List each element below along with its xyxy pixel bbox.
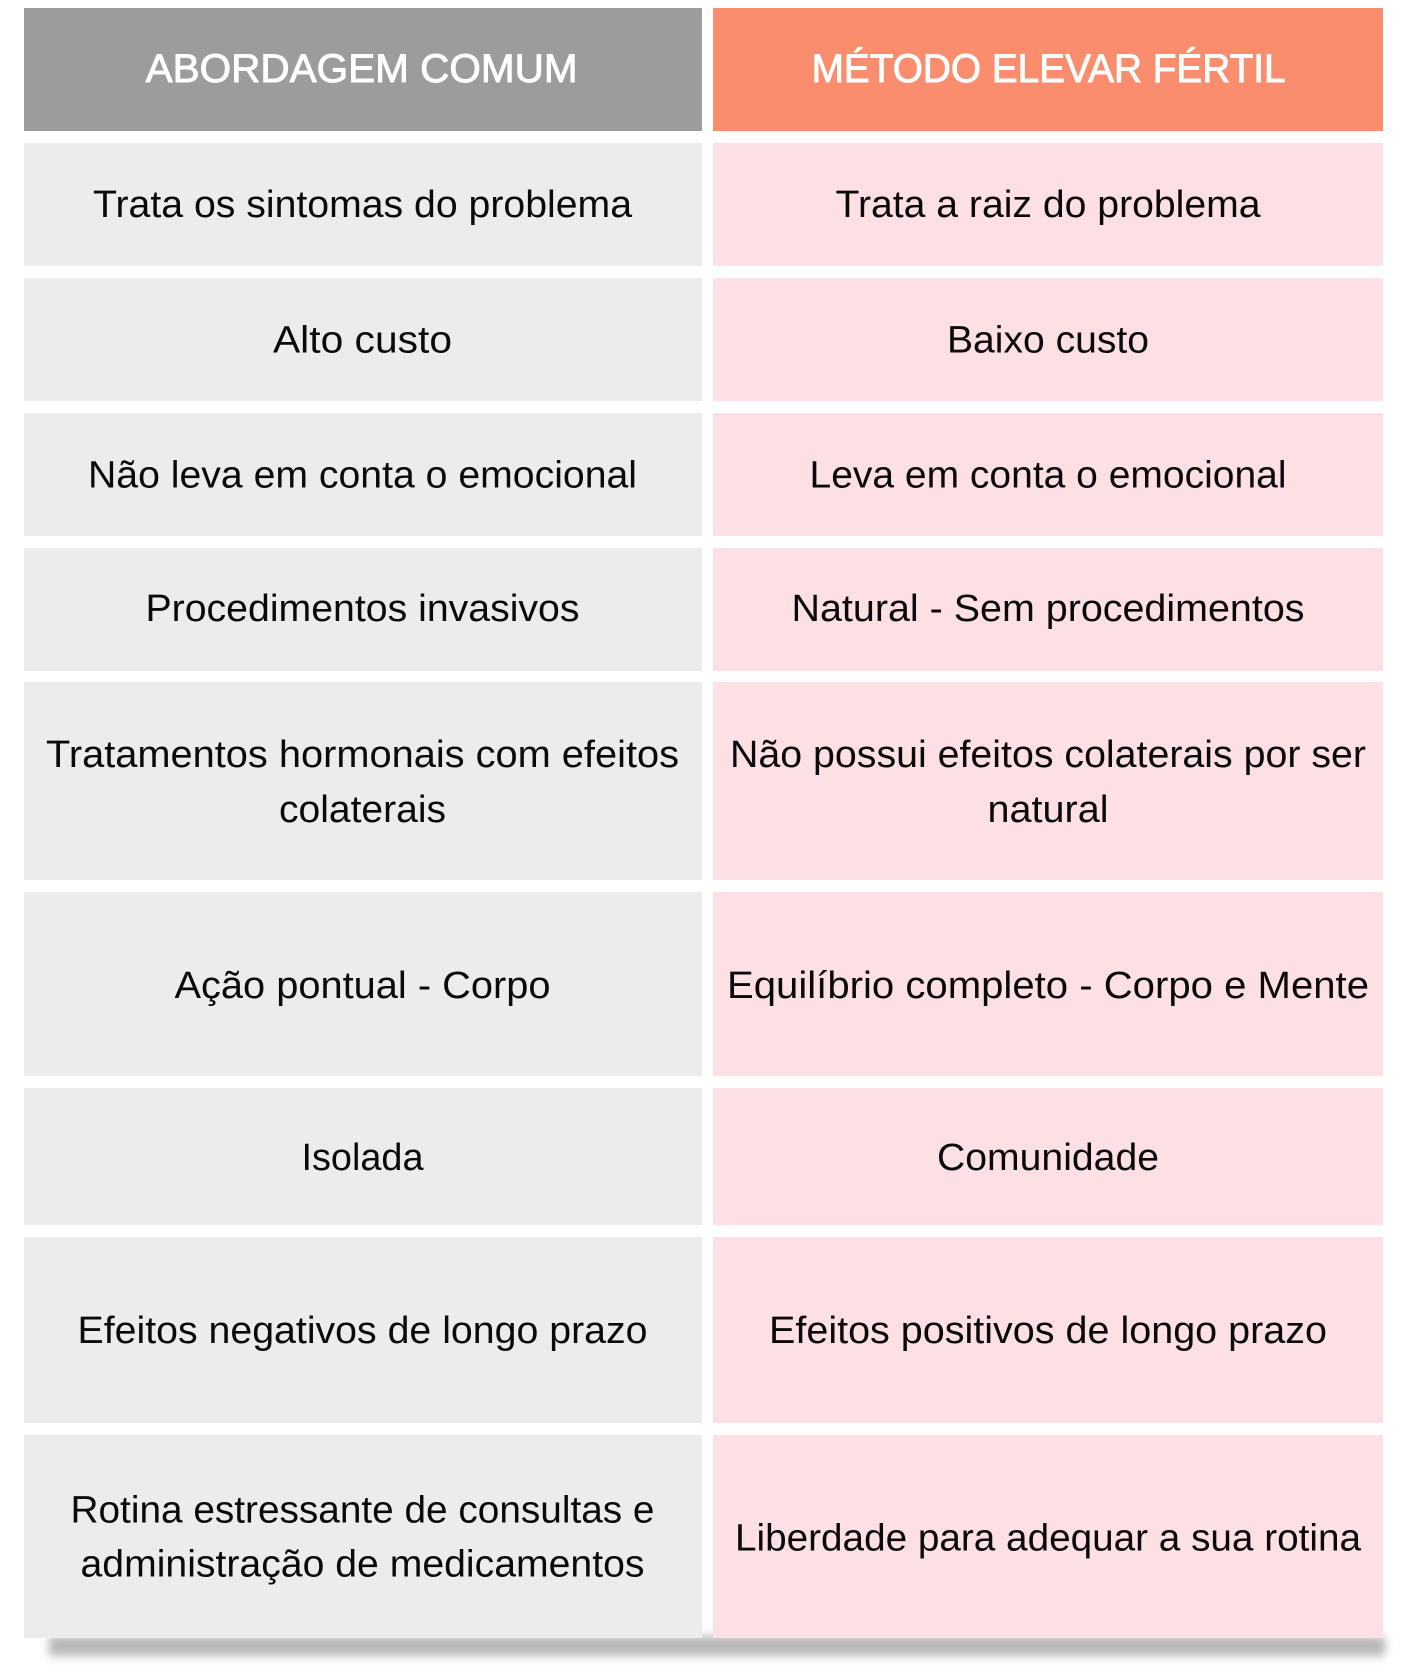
heading: abordagem comum: ABORDAGEM COMUM <box>146 47 578 91</box>
row 8 elevar: Efeitos positivos de longo prazo <box>769 1310 1327 1352</box>
row 9 comum: Rotina estressante de consultas e <box>70 1490 654 1532</box>
row 1 comum: Trata os sintomas do problema <box>93 184 633 226</box>
row 6 comum <box>24 892 702 1076</box>
row 2 elevar <box>713 278 1383 401</box>
row 7 comum: Isolada <box>302 1137 424 1179</box>
row 4 comum: Procedimentos invasivos <box>146 588 580 630</box>
row 3 elevar <box>713 413 1383 536</box>
row 2 comum <box>24 278 702 401</box>
row 8 comum <box>24 1237 702 1423</box>
table bottom shadow <box>49 1636 1385 1656</box>
row 5 elevar: natural <box>988 789 1108 831</box>
row 4 comum <box>24 548 702 671</box>
row 6 elevar: Equilíbrio completo - Corpo e Mente <box>727 965 1369 1007</box>
row 6 comum: Ação pontual - Corpo <box>174 965 550 1007</box>
row 5 elevar: Não possui efeitos colaterais por ser <box>730 734 1366 776</box>
row 9 comum <box>24 1435 702 1638</box>
row 9 elevar <box>713 1435 1383 1638</box>
row 3 comum: Não leva em conta o emocional <box>88 454 637 496</box>
row 1 elevar: Trata a raiz do problema <box>836 184 1261 226</box>
row 9 comum: administração de medicamentos <box>80 1544 644 1586</box>
heading: método elevar fértil: MÉTODO ELEVAR FÉRTIL <box>812 46 1286 91</box>
heading: abordagem comum <box>24 8 702 131</box>
row 4 elevar: Natural - Sem procedimentos <box>792 588 1304 630</box>
row 2 elevar: Baixo custo <box>947 320 1149 362</box>
row 3 elevar: Leva em conta o emocional <box>810 454 1286 496</box>
row 6 elevar <box>713 892 1383 1076</box>
row 4 elevar <box>713 548 1383 671</box>
row 8 comum: Efeitos negativos de longo prazo <box>78 1310 648 1352</box>
row 7 comum <box>24 1088 702 1225</box>
heading: método elevar fértil <box>713 8 1383 131</box>
row 8 elevar <box>713 1237 1383 1423</box>
row 5 comum: colaterais <box>279 789 446 831</box>
row 9 elevar: Liberdade para adequar a sua rotina <box>735 1518 1362 1560</box>
row 1 comum <box>24 143 702 266</box>
row 7 elevar: Comunidade <box>937 1137 1159 1179</box>
row 3 comum <box>24 413 702 536</box>
row 7 elevar <box>713 1088 1383 1225</box>
row 5 elevar <box>713 682 1383 880</box>
row 5 comum: Tratamentos hormonais com efeitos <box>46 734 679 776</box>
row 5 comum <box>24 682 702 880</box>
row 1 elevar <box>713 143 1383 266</box>
row 2 comum: Alto custo <box>273 320 452 362</box>
